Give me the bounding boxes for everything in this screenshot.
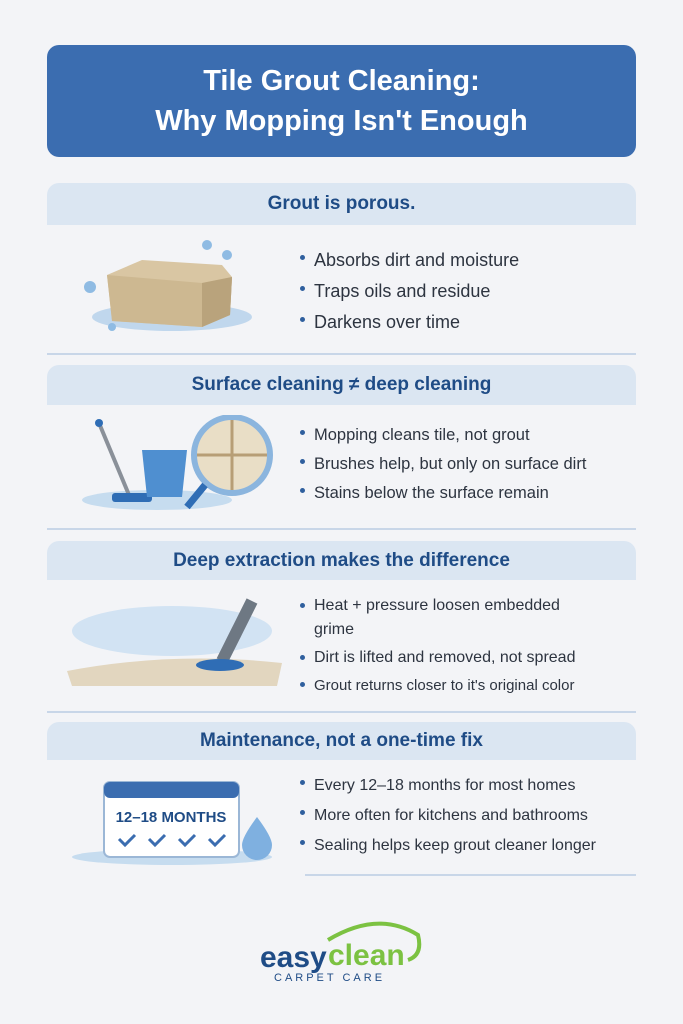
logo: clean [328, 939, 405, 972]
bullet list [300, 777, 596, 854]
icon: mop bucket magnifier [82, 415, 273, 510]
bullet list: Sealing helps keep grout cleaner longer [314, 837, 596, 854]
title: Tile Grout Cleaning: [203, 65, 480, 97]
bullet list: Mopping cleans tile, not grout [314, 426, 530, 444]
icon: calendar: 12–18 MONTHS [116, 809, 226, 826]
heading: maintenance [47, 722, 636, 760]
panel: grout is porous [47, 183, 636, 355]
heading: deep extraction: Deep extraction makes the difference [173, 550, 510, 571]
heading: maintenance: Maintenance, not a one-time fix [200, 730, 483, 751]
title [47, 45, 636, 157]
icon: calendar [72, 781, 272, 865]
bullet list: grime [314, 621, 354, 638]
panel: surface cleaning [47, 365, 636, 530]
heading: surface cleaning [47, 365, 636, 405]
bullet list: Heat + pressure loosen embedded [314, 597, 560, 614]
title: Why Mopping Isn't Enough [155, 105, 528, 137]
heading: grout is porous: Grout is porous. [268, 193, 415, 214]
bullet list [300, 250, 519, 332]
logo [260, 922, 422, 984]
bullet list: Grout returns closer to it's original color [314, 677, 574, 694]
heading: surface cleaning: Surface cleaning ≠ deep cleaning [192, 374, 491, 395]
bullet list: Stains below the surface remain [314, 484, 549, 502]
bullet list: Absorbs dirt and moisture [314, 250, 519, 270]
bullet list: Traps oils and residue [314, 281, 490, 301]
bullet list: Brushes help, but only on surface dirt [314, 455, 586, 473]
heading: deep extraction [47, 541, 636, 580]
icon: sponge [84, 240, 252, 331]
panel: maintenance [47, 722, 636, 876]
bullet list: Darkens over time [314, 312, 460, 332]
logo: easy [260, 941, 327, 974]
panel: deep extraction [47, 541, 636, 713]
bullet list [300, 597, 575, 694]
icon: extraction wand [67, 598, 282, 686]
bullet list: Dirt is lifted and removed, not spread [314, 649, 575, 666]
bullet list: Every 12–18 months for most homes [314, 777, 575, 794]
bullet list [300, 426, 586, 502]
heading: grout is porous [47, 183, 636, 225]
logo: CARPET CARE [274, 972, 385, 984]
bullet list: More often for kitchens and bathrooms [314, 807, 588, 824]
